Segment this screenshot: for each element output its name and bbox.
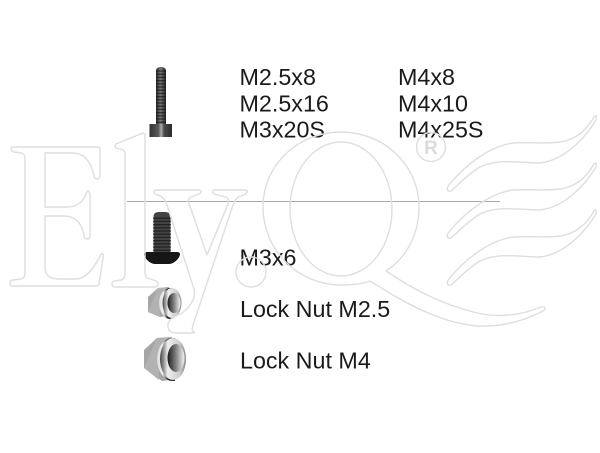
watermark letter Q xyxy=(263,132,545,326)
label column: long screws right xyxy=(398,64,483,142)
divider line xyxy=(127,200,500,202)
watermark wing bottom xyxy=(447,210,596,285)
label: Lock Nut M4: Lock Nut M4 xyxy=(240,348,371,374)
watermark registered mark: R xyxy=(424,138,438,159)
watermark letter l xyxy=(112,133,158,287)
label column: long screws right: M4x8 xyxy=(398,64,455,90)
icon: lock nut M4 xyxy=(144,337,186,381)
watermark period xyxy=(236,257,266,287)
label column: long screws right: M4x25S xyxy=(398,116,483,142)
label column: long screws left: M2.5x16 xyxy=(240,90,329,116)
label column: long screws left: M3x20S xyxy=(240,116,325,142)
label column: long screws left: M2.5x8 xyxy=(240,64,316,90)
icon: lock nut M2.5 xyxy=(148,287,182,319)
label column: long screws left xyxy=(240,64,329,142)
watermark letter y xyxy=(154,190,247,333)
watermark wing middle xyxy=(447,163,596,238)
label column: long screws right: M4x10 xyxy=(398,90,468,116)
watermark wing top xyxy=(447,116,596,191)
watermark letter E xyxy=(10,147,104,286)
watermark registered mark xyxy=(416,132,446,162)
watermark: EflyQ logo outline xyxy=(10,116,596,333)
icon: button head screw xyxy=(144,212,180,264)
icon: socket head screw xyxy=(150,67,172,137)
label: M3x6: M3x6 xyxy=(240,244,296,270)
label: Lock Nut M2.5: Lock Nut M2.5 xyxy=(240,296,390,322)
